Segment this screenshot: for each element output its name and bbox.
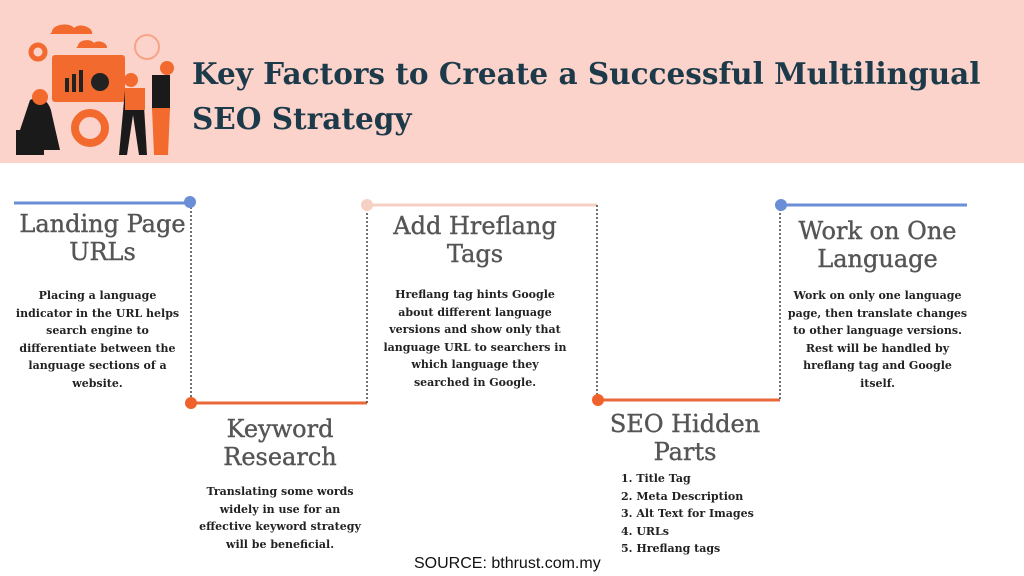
step 5: work on one language: [788, 217, 967, 390]
step 4: SEO hidden parts: 5. Hreflang tags: [621, 542, 720, 555]
header band: [0, 0, 1024, 163]
step 5: work on one language: Language: [817, 245, 938, 273]
step 3: hreflang tags: Tags: [447, 240, 503, 268]
step 5: work on one language: to other language versions.: [793, 324, 962, 337]
step 3: hreflang tags: Hreflang tag hints Google: [395, 288, 555, 301]
step 2: keyword research: Translating some words: [206, 485, 354, 498]
step 2: keyword research: Keyword: [227, 415, 333, 443]
text: search engine to: [46, 324, 149, 337]
step 2: keyword research: [199, 415, 362, 551]
step 1: landing page URLs: [16, 210, 186, 390]
text: indicator in the URL helps: [16, 307, 179, 320]
step 4: SEO hidden parts: 1. Title Tag: [621, 472, 691, 485]
heading: Landing Page: [19, 210, 186, 238]
title: SEO Strategy: [192, 101, 412, 136]
step 4: SEO hidden parts: 4. URLs: [621, 525, 669, 538]
step 3: hreflang tags: Add Hreflang: [393, 212, 557, 240]
step 3: hreflang tags: searched in Google.: [414, 376, 536, 389]
step 2: keyword research: Research: [223, 443, 337, 471]
text: [16, 289, 179, 390]
step 5: work on one language: itself.: [860, 377, 895, 390]
step 5: work on one language: Work on One: [798, 217, 956, 245]
step 5: work on one language: hreflang tag and Google: [803, 359, 952, 372]
text: differentiate between the: [19, 342, 176, 355]
step 2: keyword research: will be beneficial.: [226, 538, 334, 551]
heading: URLs: [69, 238, 136, 266]
source: SOURCE: bthrust.com.my: [414, 555, 601, 572]
heading: [19, 210, 186, 266]
step 4: SEO hidden parts: 2. Meta Description: [621, 490, 743, 503]
step 4: SEO hidden parts: [610, 410, 760, 555]
step 2: keyword research: widely in use for an: [220, 503, 340, 516]
step 5: work on one language: Work on only one language: [794, 289, 961, 302]
title: Key Factors to Create a Successful Multilingual: [192, 56, 981, 91]
step 3: hreflang tags: versions and show only that: [389, 323, 561, 336]
title: [192, 56, 981, 136]
step 3: hreflang tags: about different language: [398, 306, 552, 319]
step 4: SEO hidden parts: Parts: [654, 438, 716, 466]
step 5: work on one language: Rest will be handled by: [806, 342, 949, 355]
text: Placing a language: [39, 289, 156, 302]
illustration: team with dashboard: [16, 24, 174, 155]
step 4: SEO hidden parts: 3. Alt Text for Images: [621, 507, 754, 520]
step 3: hreflang tags: which language they: [411, 358, 539, 371]
step 4: SEO hidden parts: SEO Hidden: [610, 410, 760, 438]
step 5: work on one language: page, then translate changes: [788, 307, 967, 320]
step 3: hreflang tags: language URL to searchers in: [384, 341, 566, 354]
step 3: hreflang tags: [384, 212, 566, 389]
step 2: keyword research: effective keyword strategy: [199, 520, 361, 533]
text: website.: [72, 377, 123, 390]
text: language sections of a: [28, 359, 167, 372]
